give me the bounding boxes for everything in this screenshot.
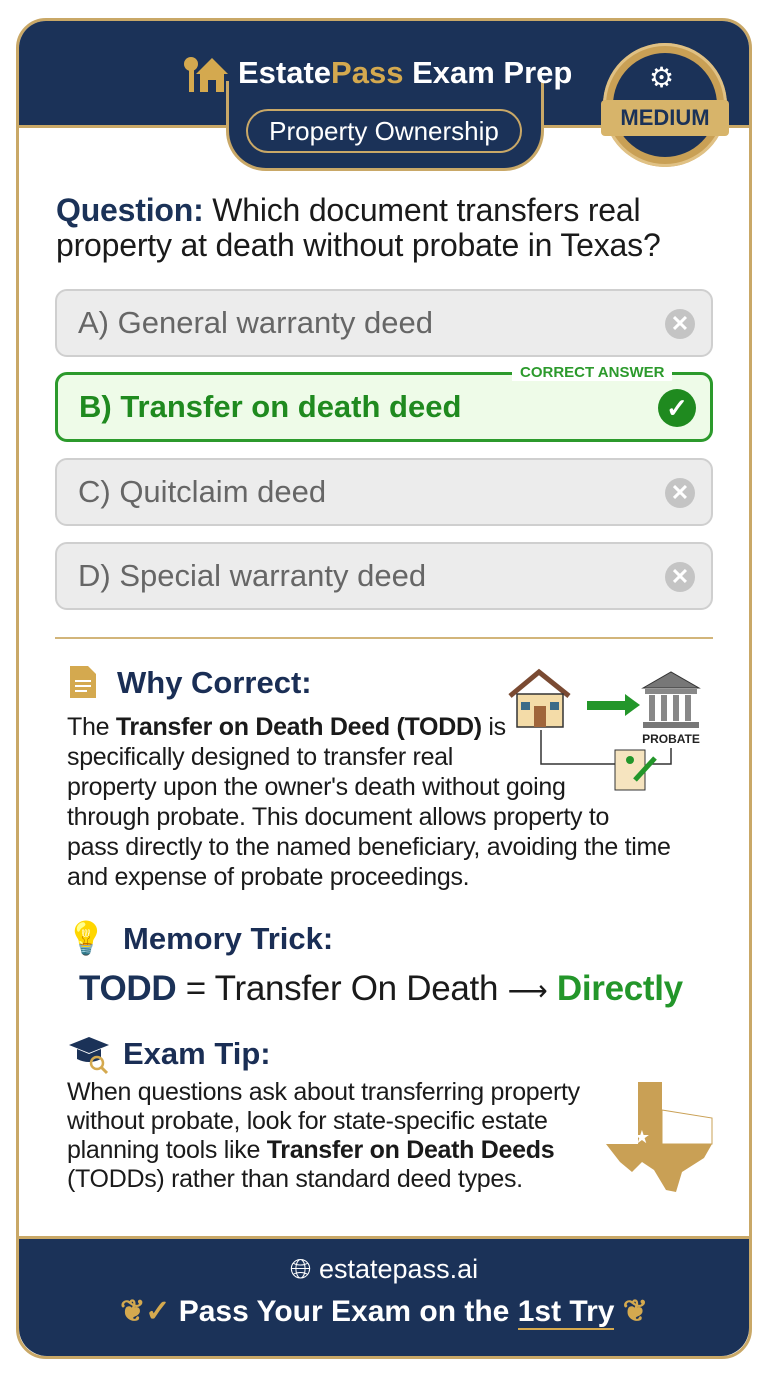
why text: The Transfer on Death Deed (TODD) is xyxy=(67,713,506,741)
tip text: planning tools like Transfer on Death Deeds xyxy=(67,1136,554,1164)
logo icon: house key xyxy=(184,57,228,92)
icon: graduation cap xyxy=(69,1037,109,1074)
header band xyxy=(19,21,755,128)
option C xyxy=(55,458,713,526)
why text: through probate. This document allows property to xyxy=(67,803,609,831)
icon: texas map: ★ xyxy=(634,1127,650,1147)
heading: exam tip: Exam Tip: xyxy=(123,1036,271,1071)
option A xyxy=(55,289,713,357)
header tab xyxy=(226,81,544,171)
heading: why correct: Why Correct: xyxy=(117,665,312,700)
icon: texas map xyxy=(606,1082,712,1192)
question xyxy=(56,192,661,263)
icon: lightbulb: 💡 xyxy=(66,920,106,956)
category pill xyxy=(246,109,522,153)
option D: ✕ xyxy=(671,564,689,589)
tip text: (TODDs) rather than standard deed types. xyxy=(67,1165,523,1193)
option C: C) Quitclaim deed xyxy=(78,474,326,509)
correct answer label: CORRECT ANSWER xyxy=(520,364,664,381)
diagram: house to probate: PROBATE xyxy=(642,732,700,746)
option B correct: ✓ xyxy=(666,393,688,423)
tagline: ❦✓ Pass Your Exam on the 1st Try ❦ xyxy=(120,1295,648,1328)
why text: pass directly to the named beneficiary, avoiding the time xyxy=(67,833,671,861)
option D: D) Special warranty deed xyxy=(78,558,426,593)
option C: ✕ xyxy=(671,480,689,505)
why text: property upon the owner's death without going xyxy=(67,773,566,801)
option A: ✕ xyxy=(671,311,689,336)
category pill: Property Ownership xyxy=(269,116,499,146)
memory formula: TODD = Transfer On Death ⟶ Directly xyxy=(79,969,683,1008)
difficulty badge: ⚙ xyxy=(649,62,674,93)
option D xyxy=(55,542,713,610)
tip text: When questions ask about transferring property xyxy=(67,1078,580,1106)
why text: specifically designed to transfer real xyxy=(67,743,453,771)
difficulty badge: MEDIUM xyxy=(620,105,710,130)
option B correct: B) Transfer on death deed xyxy=(79,389,461,424)
footer xyxy=(19,1236,749,1356)
website: 🌐︎ estatepass.ai xyxy=(290,1254,478,1284)
title: EstatePass Exam Prep xyxy=(238,55,572,90)
option B correct xyxy=(55,372,713,442)
tip text: without probate, look for state-specific estate xyxy=(67,1107,548,1135)
difficulty badge xyxy=(603,43,727,167)
why text xyxy=(67,713,671,891)
diagram: house to probate xyxy=(508,668,701,790)
tip text xyxy=(67,1078,580,1193)
why text: and expense of probate proceedings. xyxy=(67,863,469,891)
question: property at death without probate in Texas? xyxy=(56,227,661,263)
question: Question: Which document transfers real xyxy=(56,192,640,228)
icon: document xyxy=(70,666,96,698)
option A: A) General warranty deed xyxy=(78,305,433,340)
heading: memory trick: Memory Trick: xyxy=(123,921,333,956)
